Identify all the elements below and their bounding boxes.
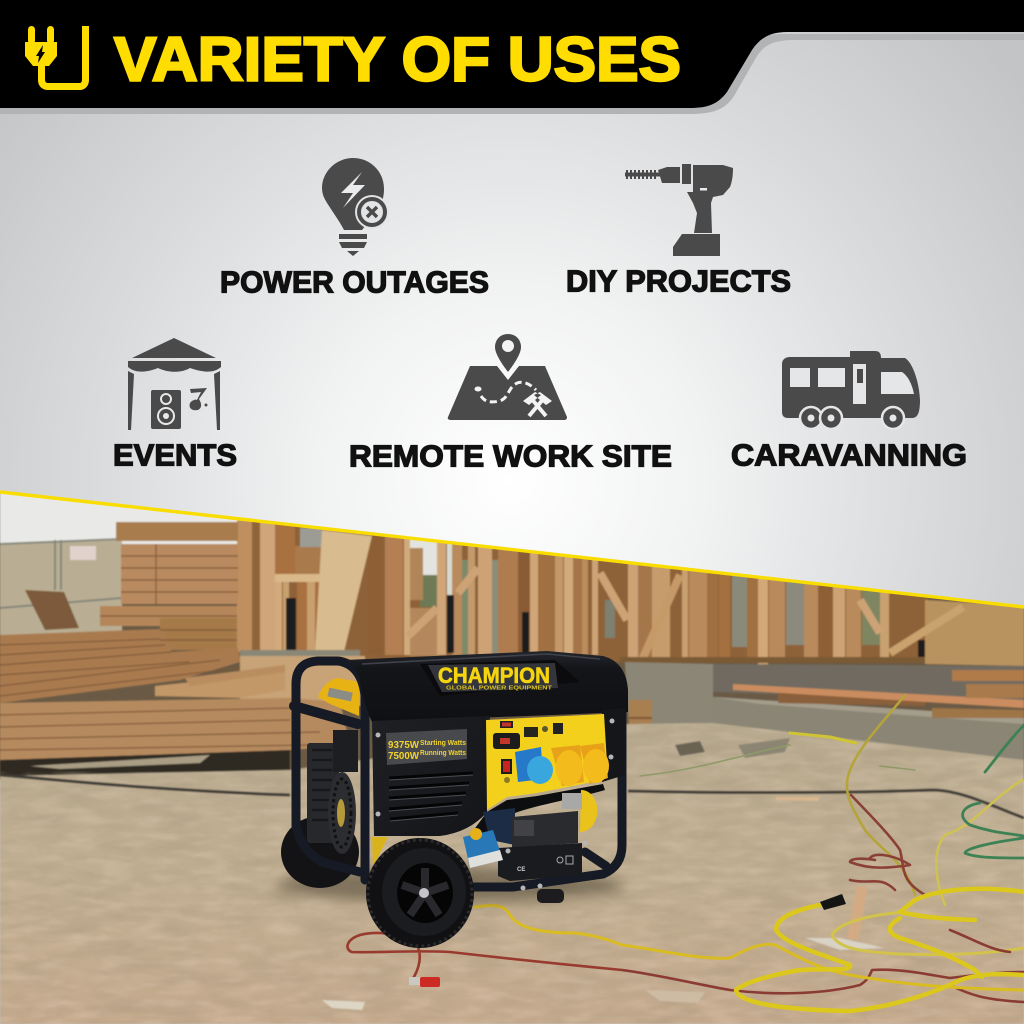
wattage label: Starting Watts <box>420 738 466 747</box>
yellow sockets <box>551 743 609 786</box>
photo base <box>0 480 1024 780</box>
item: remote work site <box>349 334 672 474</box>
item: diy projects <box>566 164 791 298</box>
control panel yellow <box>486 714 607 810</box>
diagonal yellow divider <box>0 492 1024 607</box>
label: REMOTE WORK SITE <box>349 438 672 474</box>
black pipes <box>285 594 926 658</box>
wall backing <box>238 520 928 662</box>
label: CARAVANNING <box>731 438 967 472</box>
wattage label: Running Watts <box>420 748 466 757</box>
engine cover grey <box>562 793 582 809</box>
front wheel <box>366 838 474 948</box>
blue socket <box>515 747 553 784</box>
label: DIY PROJECTS <box>566 264 791 298</box>
fuel tank label <box>327 688 353 701</box>
osb sheathing <box>925 600 1024 666</box>
engine <box>307 730 358 854</box>
yellow hose <box>372 837 388 867</box>
ground cable <box>0 775 1024 818</box>
rear wheel <box>281 816 359 888</box>
leaning panel <box>315 530 372 656</box>
photo: construction site <box>0 480 1024 1024</box>
icon: map with pin and crossed hammers <box>448 334 567 420</box>
fence <box>0 539 122 640</box>
brand plate <box>420 660 580 696</box>
wattage label: 7500W <box>388 750 419 762</box>
wall studs <box>236 520 890 666</box>
housing screws <box>376 718 614 816</box>
wattage label: 9375W <box>388 739 419 751</box>
header banner <box>0 0 1024 114</box>
blue tag <box>463 828 503 868</box>
icon: caravan motorhome <box>782 351 920 429</box>
foot <box>537 889 564 903</box>
dark right strip <box>602 708 625 782</box>
alternator yellow <box>580 790 597 832</box>
timber shadow <box>0 750 290 776</box>
battery box <box>498 811 588 890</box>
hood highlight <box>362 654 600 664</box>
generator shadow <box>275 868 625 902</box>
wattage label <box>386 729 467 765</box>
right side cables <box>475 695 1024 1011</box>
generator <box>275 651 628 948</box>
fuel tank yellow <box>318 678 359 716</box>
item: caravanning <box>731 351 967 472</box>
engine parts under panel <box>483 808 515 845</box>
vent slots <box>389 773 473 821</box>
planks on foundation <box>628 669 1024 724</box>
icon: gazebo with speaker and music note <box>128 338 221 430</box>
wall gaps <box>410 530 881 656</box>
icon: cordless drill <box>625 164 733 256</box>
top hood <box>345 651 628 722</box>
label: EVENTS <box>113 438 237 472</box>
brand plate: GLOBAL POWER EQUIPMENT <box>446 686 552 692</box>
battery box: CE <box>517 867 525 873</box>
under panel shadow <box>470 784 605 835</box>
frame tubes <box>294 661 622 887</box>
icon: plug with cord <box>25 26 89 90</box>
panel controls <box>493 721 563 783</box>
plug black <box>820 894 846 910</box>
stacked timber <box>0 522 350 760</box>
red extension cord <box>347 933 622 987</box>
item: power outages <box>220 158 489 300</box>
sky <box>0 494 244 546</box>
item: events <box>113 338 237 472</box>
debris <box>322 738 885 1010</box>
title: VARIETY OF USES <box>114 26 681 94</box>
label: POWER OUTAGES <box>220 264 489 300</box>
brand plate: CHAMPION <box>438 663 550 688</box>
side housing <box>372 716 490 836</box>
concrete foundation <box>240 650 1024 762</box>
ground <box>0 720 1024 1024</box>
icon: light bulb with bolt and cross <box>322 158 389 256</box>
